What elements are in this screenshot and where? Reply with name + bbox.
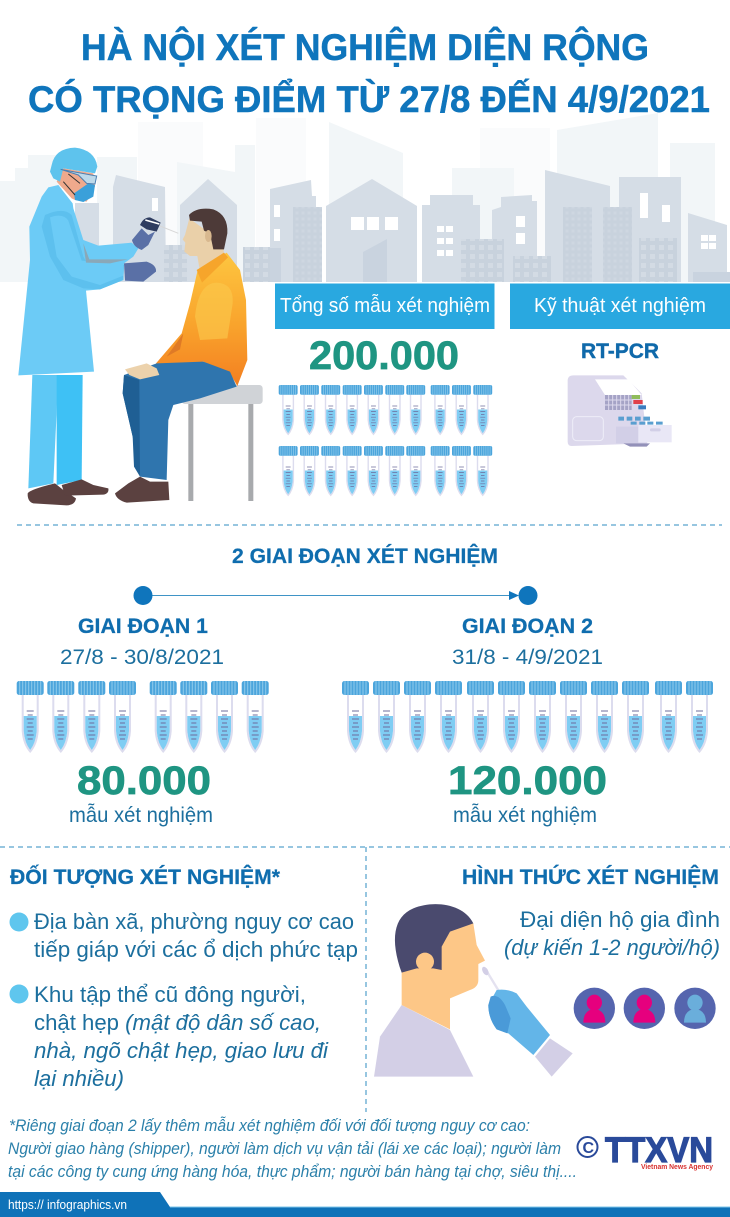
stool	[182, 385, 263, 501]
logo: TTXVN: Vietnam News Agency	[641, 1164, 713, 1171]
testing form text: Đại diện hộ gia đình	[520, 907, 720, 932]
patient	[115, 209, 247, 503]
logo: TTXVN: C	[582, 1140, 594, 1157]
bullet: second target group: chật hẹp (mật độ dân số cao,	[34, 1010, 321, 1035]
doctor	[18, 148, 178, 505]
target groups heading: ĐỐI TƯỢNG XÉT NGHIỆM*	[10, 865, 281, 889]
illustration: man receiving swab	[374, 904, 573, 1077]
title	[28, 26, 710, 120]
icon: three household members	[574, 988, 716, 1029]
arrow: timeline	[134, 586, 538, 605]
phase 1 heading: GIAI ĐOẠN 1	[78, 615, 208, 638]
footnote	[8, 1116, 577, 1181]
city skyline background	[0, 113, 730, 282]
title: CÓ TRỌNG ĐIỂM TỪ 27/8 ĐẾN 4/9/2021	[28, 78, 710, 120]
footer bar: https:// infographics.vn	[8, 1197, 127, 1212]
bullet: first target group: tiếp giáp với các ổ dịch phức tạp	[34, 937, 358, 962]
heading: two phases: 2 GIAI ĐOẠN XÉT NGHIỆM	[232, 544, 498, 568]
tubes grid	[279, 385, 492, 496]
logo: TTXVN: TTXVN	[605, 1131, 713, 1170]
phase 2 unit: mẫu xét nghiệm	[453, 804, 597, 827]
icon: PCR machine	[568, 375, 672, 447]
bullet: second target group: nhà, ngõ chật hẹp, giao lưu đi	[34, 1038, 329, 1063]
footnote: *Riêng giai đoạn 2 lấy thêm mẫu xét nghiệm đối với đối tượng nguy cơ cao:	[9, 1116, 530, 1135]
panel: phase 1	[17, 615, 269, 827]
header: technique	[510, 284, 730, 329]
phase 1 unit: mẫu xét nghiệm	[69, 804, 213, 827]
phase 1 number: 80.000	[77, 759, 211, 803]
footer bar	[0, 1192, 730, 1217]
bullet: second target group: Khu tập thể cũ đông người,	[34, 982, 306, 1007]
bullet: first target group	[10, 909, 358, 962]
footnote: Người giao hàng (shipper), người làm dịch vụ vận tải (lái xe các loại); người làm	[8, 1140, 561, 1158]
bullet: second target group	[10, 982, 329, 1091]
panel: target groups	[10, 865, 358, 1091]
testing form heading: HÌNH THỨC XÉT NGHIỆM	[462, 865, 719, 889]
panel: total samples	[275, 284, 494, 496]
header: total samples: Tổng số mẫu xét nghiệm	[280, 294, 490, 317]
illustration: doctor swabbing patient	[18, 148, 263, 505]
bullet: first target group: Địa bàn xã, phường nguy cơ cao	[34, 909, 354, 934]
number: 200.000: 200.000	[309, 334, 459, 378]
header: technique: Kỹ thuật xét nghiệm	[534, 295, 706, 317]
phase 2 number: 120.000	[448, 759, 607, 803]
title: HÀ NỘI XÉT NGHIỆM DIỆN RỘNG	[81, 26, 649, 68]
panel: phase 2	[342, 615, 713, 827]
label: RT-PCR: RT-PCR	[581, 340, 659, 363]
phase 1 tubes	[17, 681, 269, 753]
panel: technique	[510, 284, 730, 447]
header: total samples	[275, 284, 494, 329]
bullet: second target group: lại nhiều)	[34, 1066, 124, 1091]
panel: testing form	[374, 865, 720, 1077]
testing form text: (dự kiến 1-2 người/hộ)	[504, 935, 720, 960]
testing form text	[504, 907, 720, 960]
phase 1 dates: 27/8 - 30/8/2021	[60, 645, 224, 669]
phase 2 dates: 31/8 - 4/9/2021	[452, 645, 603, 669]
phase 2 heading: GIAI ĐOẠN 2	[462, 615, 593, 638]
phase 2 tubes	[342, 681, 713, 753]
footnote: tại các công ty cung ứng hàng hóa, thực phẩm; người bán hàng tại chợ, siêu thị....	[8, 1163, 577, 1181]
